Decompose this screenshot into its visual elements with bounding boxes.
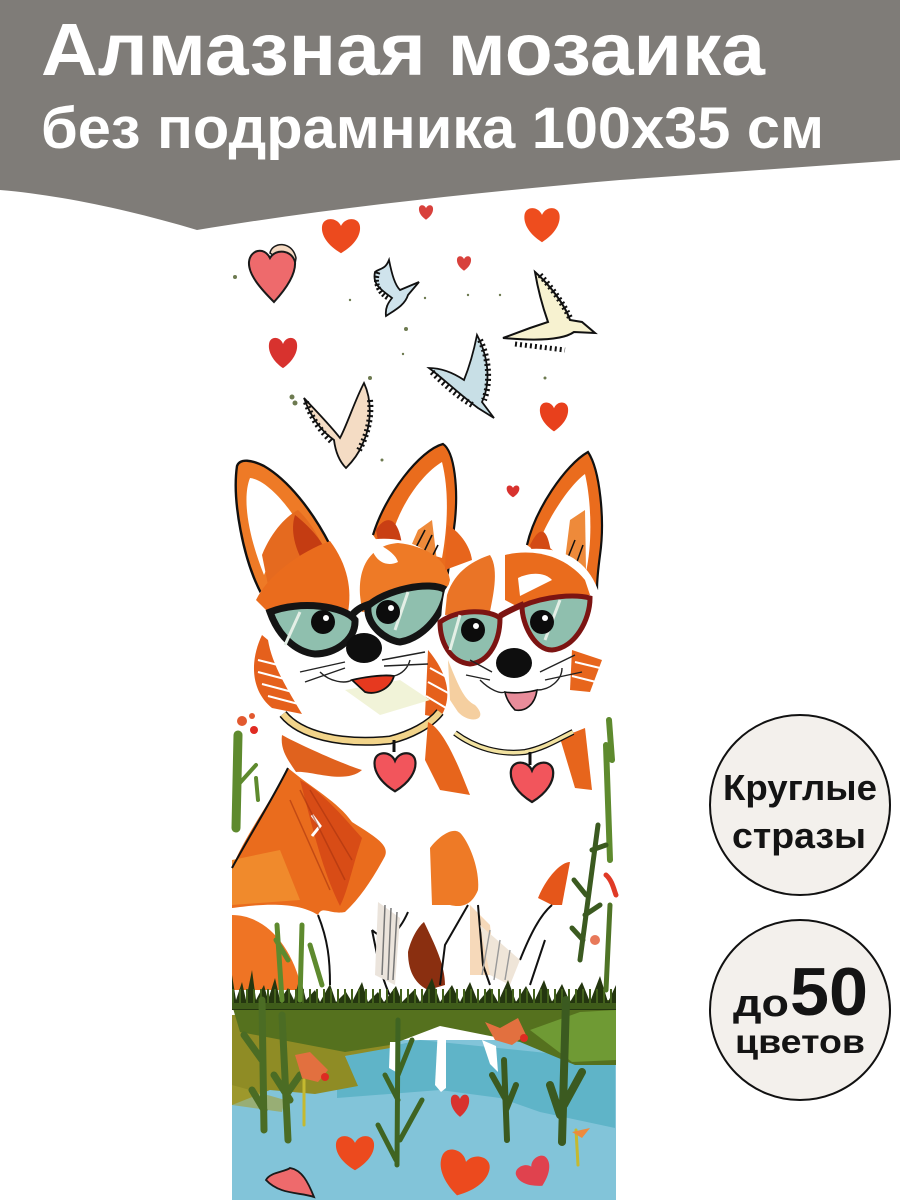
title line 2: без подрамника 100х35 см (41, 96, 824, 161)
nose and mouth (466, 648, 582, 710)
bird 4 (304, 383, 370, 468)
plants and reeds (236, 713, 616, 1165)
pond and grass bank (232, 1000, 616, 1200)
bird 1 (374, 260, 419, 316)
badge: up to 50 colours: цветов (735, 1023, 865, 1060)
birds (304, 260, 595, 468)
paint speckles (233, 275, 546, 462)
nose and mouth (300, 633, 428, 693)
header banner (0, 0, 900, 230)
bird 3 (429, 335, 494, 418)
outlined heart top left (249, 245, 296, 302)
badge: up to 50 colours (710, 920, 890, 1100)
right ear (373, 444, 456, 578)
pond reeds (304, 1000, 582, 1165)
badge: up to 50 colours: 50 (790, 954, 868, 1030)
collar and heart tag (455, 732, 573, 802)
ears (445, 452, 602, 590)
grass blades (232, 970, 616, 1010)
badge: round rhinestones: Круглые (723, 767, 877, 808)
head (254, 539, 454, 726)
left grass reeds (244, 925, 322, 1140)
badge: up to 50 colours: до (733, 983, 789, 1025)
title line 1: Алмазная мозаика (41, 8, 766, 91)
left side stem with flower (236, 713, 258, 828)
body (232, 715, 470, 1000)
head (441, 549, 602, 729)
hearts (249, 205, 568, 1200)
water flowers (295, 935, 600, 1138)
right corgi (408, 452, 602, 990)
right side stems (572, 720, 616, 990)
left corgi (232, 444, 470, 1000)
artwork: corgis in glasses (232, 205, 616, 1200)
left ear (236, 461, 330, 595)
badge: round rhinestones: стразы (732, 815, 866, 856)
bird 2 (503, 272, 595, 350)
black glasses (270, 586, 446, 654)
badge: round rhinestones (710, 715, 890, 895)
collar and heart tag (283, 712, 440, 791)
body (408, 722, 600, 990)
red glasses (440, 596, 590, 664)
